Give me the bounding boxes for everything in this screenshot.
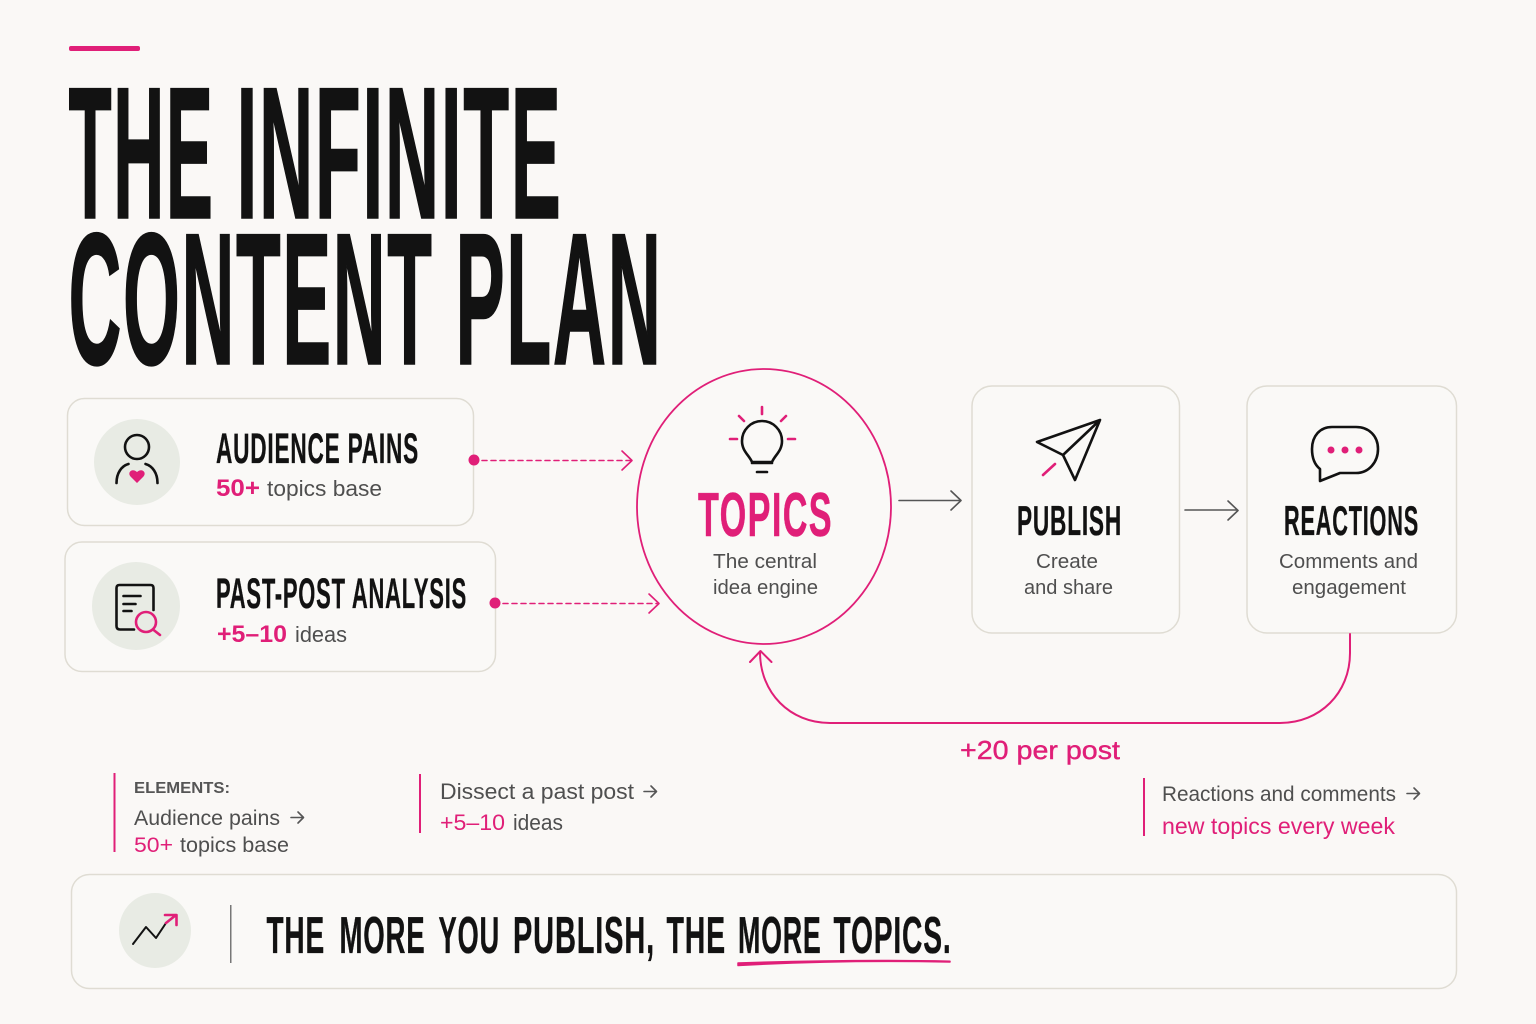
- takeaway text: YOU: [438, 907, 500, 965]
- panel: audience pains: [68, 398, 474, 526]
- stat: topics base: 50+: [216, 475, 260, 502]
- description: reactions: engagement: [1292, 577, 1406, 599]
- takeaway text: PUBLISH,: [513, 907, 655, 965]
- stat: topics base: [216, 475, 382, 502]
- takeaway text: THE: [666, 907, 726, 965]
- arrow: topics to publish: [899, 491, 961, 510]
- description: publish: [1024, 551, 1113, 599]
- stat: ideas: +5–10: [217, 621, 287, 648]
- note: dissect a past post: ideas: [513, 810, 563, 835]
- takeaway text: THE: [266, 907, 325, 965]
- description: reactions: [1279, 551, 1418, 599]
- arrow: feedback loop: [750, 634, 1350, 723]
- takeaway text: MORE: [738, 907, 822, 965]
- title: [68, 48, 662, 404]
- description: publish: Create: [1036, 551, 1098, 573]
- note: elements: 50+: [134, 834, 173, 857]
- title: INFINITE: [236, 48, 562, 258]
- note: dissect a past post: +5–10: [440, 810, 505, 835]
- heading: audience pains: AUDIENCE PAINS: [216, 425, 419, 473]
- takeaway text: MORE: [340, 907, 426, 965]
- panel: publish: [972, 386, 1180, 633]
- stat: ideas: [217, 621, 347, 648]
- panel: reactions: [1247, 386, 1456, 633]
- arrow: past-post analysis to topics: [490, 594, 659, 613]
- icon: growth chart: [119, 893, 191, 968]
- description: topics: The central: [713, 551, 817, 573]
- icon: paper plane: [1037, 420, 1100, 480]
- takeaway text: [266, 907, 952, 965]
- underline: [738, 960, 950, 966]
- description: topics: idea engine: [713, 577, 818, 599]
- arrow: publish to reactions: [1185, 501, 1238, 520]
- note: elements: topics base: [180, 834, 289, 857]
- heading: topics: TOPICS: [698, 481, 833, 550]
- accent bar: [69, 46, 140, 51]
- text: PLAN: [456, 194, 662, 404]
- title: CONTENT: [68, 194, 434, 404]
- stat: topics base: topics base: [267, 476, 382, 501]
- arrow: audience pains to topics: [468, 451, 632, 470]
- title: THE: [68, 48, 214, 258]
- note: elements: Audience pains: [134, 807, 280, 830]
- icon: light bulb: [730, 407, 795, 472]
- icon: document with magnifier: [92, 562, 180, 650]
- note: elements: [114, 773, 304, 857]
- icon: speech bubble: [1312, 427, 1378, 481]
- panel: takeaway: [72, 874, 1456, 988]
- description: reactions: Comments and: [1279, 551, 1418, 573]
- heading: publish: PUBLISH: [1017, 497, 1122, 544]
- heading: past-post analysis: PAST-POST ANALYSIS: [216, 570, 467, 618]
- panel: past-post analysis: [65, 542, 496, 672]
- note: reactions and comments: new topics every week: [1162, 813, 1395, 839]
- note: dissect a past post: [419, 774, 656, 835]
- label: plus twenty per post: +20 per post: [960, 735, 1121, 765]
- note: elements: ELEMENTS:: [134, 780, 230, 797]
- panel: topics circle: [637, 369, 891, 644]
- description: publish: and share: [1024, 577, 1113, 599]
- note: reactions and comments: Reactions and comments: [1162, 783, 1396, 806]
- description: topics: [713, 551, 818, 599]
- icon: person with heart: [94, 419, 180, 505]
- takeaway text: TOPICS.: [834, 907, 952, 965]
- stat: ideas: ideas: [295, 622, 347, 647]
- note: reactions and comments: [1143, 778, 1420, 839]
- divider: [230, 905, 232, 963]
- note: dissect a past post: Dissect a past post: [440, 779, 634, 804]
